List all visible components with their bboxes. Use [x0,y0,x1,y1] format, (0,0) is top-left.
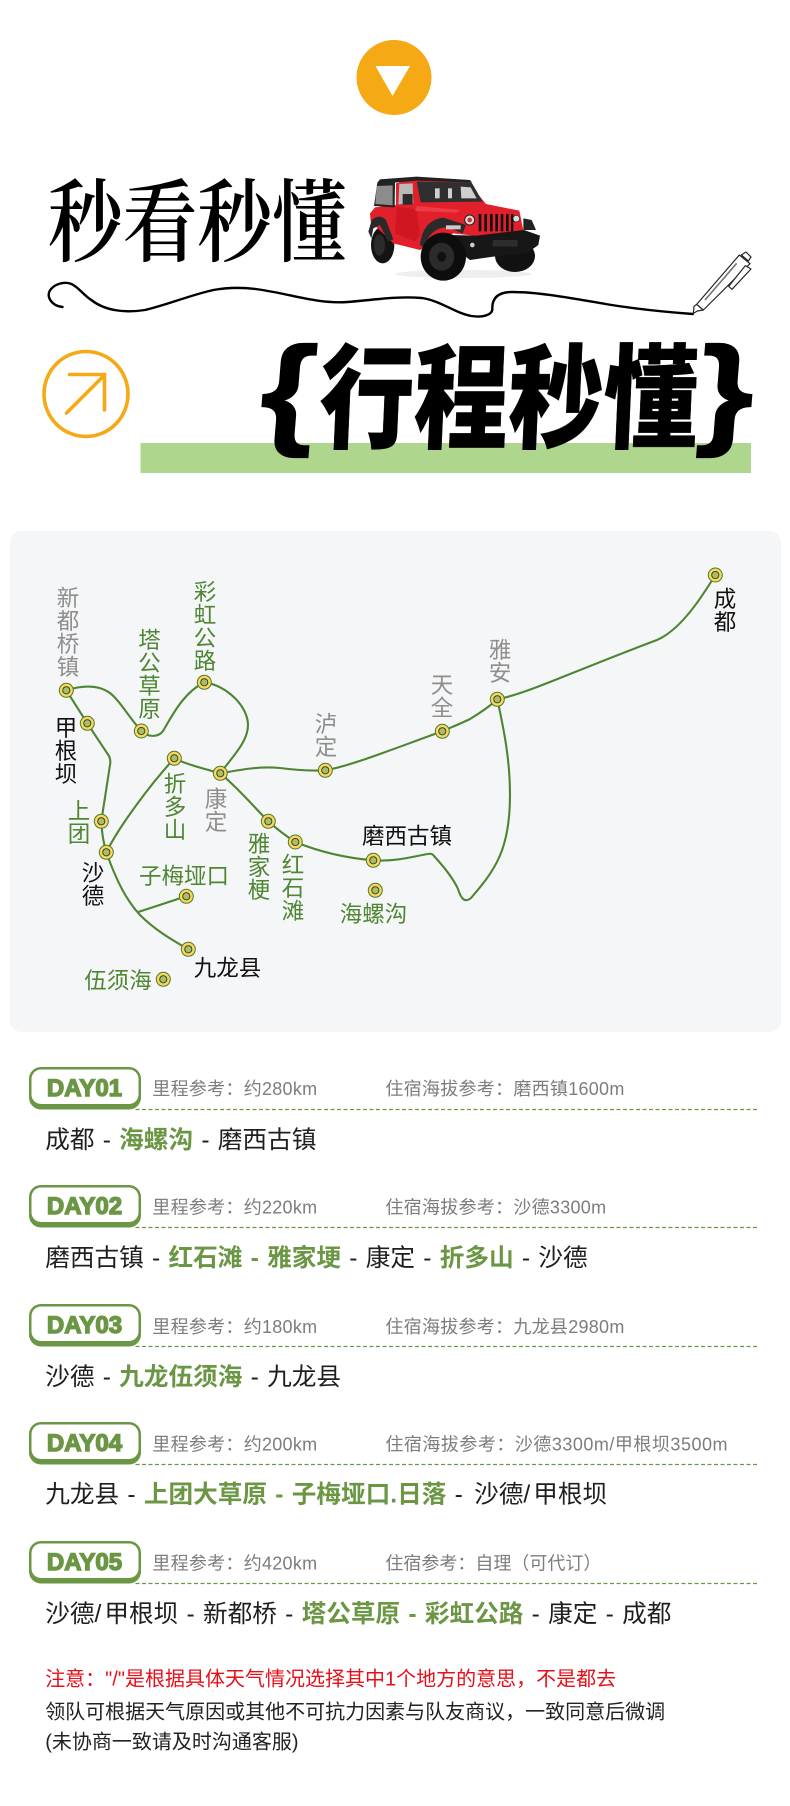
place labels: 坝 [55,762,77,787]
place labels: 公 [138,651,161,676]
badge DAY01: DAY01 [47,1075,122,1102]
panel: route map [10,531,781,1032]
day 4 row: 九龙县 - 上团大草原 - 子梅垭口.日落 - 沙德/甲根坝 [45,1480,607,1508]
place labels: 虹 [194,603,216,628]
badge DAY02: DAY02 [47,1193,122,1220]
day 3 row: 里程参考：约180km [152,1317,317,1337]
place labels: 桥 [57,632,79,657]
right brace: } [694,322,759,458]
place labels: 多 [164,795,186,820]
green highlight bar [140,443,751,473]
icon: arrow in circle [44,352,128,436]
badge DAY04: DAY04 [47,1430,123,1457]
day 5 row: 住宿参考：自理（可代订） [385,1554,601,1574]
place labels: 康 [205,787,227,812]
day 5 row: 里程参考：约420km [152,1554,317,1574]
place labels: 都 [714,610,736,635]
place labels: 天 [431,673,453,698]
place labels: 沙 [82,861,104,886]
place labels: 山 [164,818,186,843]
badge DAY04 [29,1422,141,1464]
day 3 row [29,1304,757,1391]
place labels [55,580,736,994]
place labels: 家 [248,855,270,880]
place labels: 定 [205,810,227,835]
place labels: 伍须海 [84,968,152,994]
badge DAY03: DAY03 [47,1312,122,1339]
badge DAY01 [29,1067,141,1110]
badge DAY05 [29,1541,141,1584]
day 2 row: 住宿海拔参考：沙德3300m [385,1198,606,1218]
badge DAY03 [29,1304,141,1346]
place labels: 梗 [248,878,270,903]
notes block: (未协商一致请及时沟通客服) [45,1730,299,1754]
notes block [45,1668,665,1754]
badge DAY02 [29,1185,141,1228]
place labels: 镇 [57,655,79,680]
notes block: 领队可根据天气原因或其他不可抗力因素与队友商议，一致同意后微调 [45,1700,665,1724]
place labels: 路 [194,649,216,674]
day 1 row: 里程参考：约280km [152,1079,317,1099]
place labels: 新 [57,586,79,611]
place labels: 磨西古镇 [362,824,452,849]
day 3 row: 沙德 - 九龙伍须海 - 九龙县 [45,1363,341,1391]
place labels: 原 [138,697,161,722]
left brace: { [256,322,321,458]
icon: orange circle with down triangle [356,40,432,115]
icon: red jeep [368,177,540,281]
title: 秒看秒懂: 秒看秒懂 [48,151,347,280]
place labels: 甲 [55,716,77,741]
place labels: 德 [82,884,104,909]
place labels: 都 [57,609,79,634]
notes block: 注意："/"是根据具体天气情况选择其中1个地方的意思，不是都去 [45,1668,616,1690]
day 4 row [29,1422,757,1508]
day 1 row: 住宿海拔参考：磨西镇1600m [385,1079,625,1099]
place labels: 上 [68,799,90,824]
place labels: 全 [431,696,453,721]
place labels: 滩 [282,899,304,924]
icon: pen [693,252,751,313]
day 1 row [29,1067,757,1154]
place labels: 安 [489,661,511,686]
day 5 row: 沙德/甲根坝 - 新都桥 - 塔公草原 - 彩虹公路 - 康定 - 成都 [45,1600,671,1628]
day 2 row: 里程参考：约220km [152,1198,317,1218]
place labels: 塔 [138,628,161,653]
heading: 行程秒懂 [256,309,759,473]
day 2 row: 磨西古镇 - 红石滩 - 雅家埂 - 康定 - 折多山 - 沙德 [45,1244,588,1272]
place labels: 九龙县 [194,956,261,981]
day 5 row [29,1541,757,1628]
place labels: 海螺沟 [340,902,407,927]
place labels: 团 [68,822,90,847]
handwritten curve line [49,283,693,317]
day 3 row: 住宿海拔参考：九龙县2980m [385,1317,625,1337]
route nodes [59,568,722,986]
place labels: 折 [164,772,186,797]
place labels: 雅 [489,638,511,663]
place labels: 成 [714,587,736,612]
place labels: 泸 [315,712,337,737]
place labels: 石 [282,876,304,901]
day 2 row [29,1185,757,1272]
route lines [66,575,715,949]
place labels: 公 [194,626,216,651]
place labels: 定 [315,735,337,760]
place labels: 红 [282,853,304,878]
heading text: 行程秒懂 [317,309,702,473]
place labels: 彩 [194,580,216,605]
place labels: 根 [55,739,77,764]
badge DAY05: DAY05 [47,1549,122,1576]
place labels: 草 [138,674,161,699]
day 4 row: 住宿海拔参考：沙德3300m/甲根坝3500m [385,1434,728,1454]
place labels: 子梅垭口 [139,864,229,889]
place labels: 雅 [248,832,270,857]
day 1 row: 成都 - 海螺沟 - 磨西古镇 [45,1126,316,1154]
day 4 row: 里程参考：约200km [152,1434,317,1454]
